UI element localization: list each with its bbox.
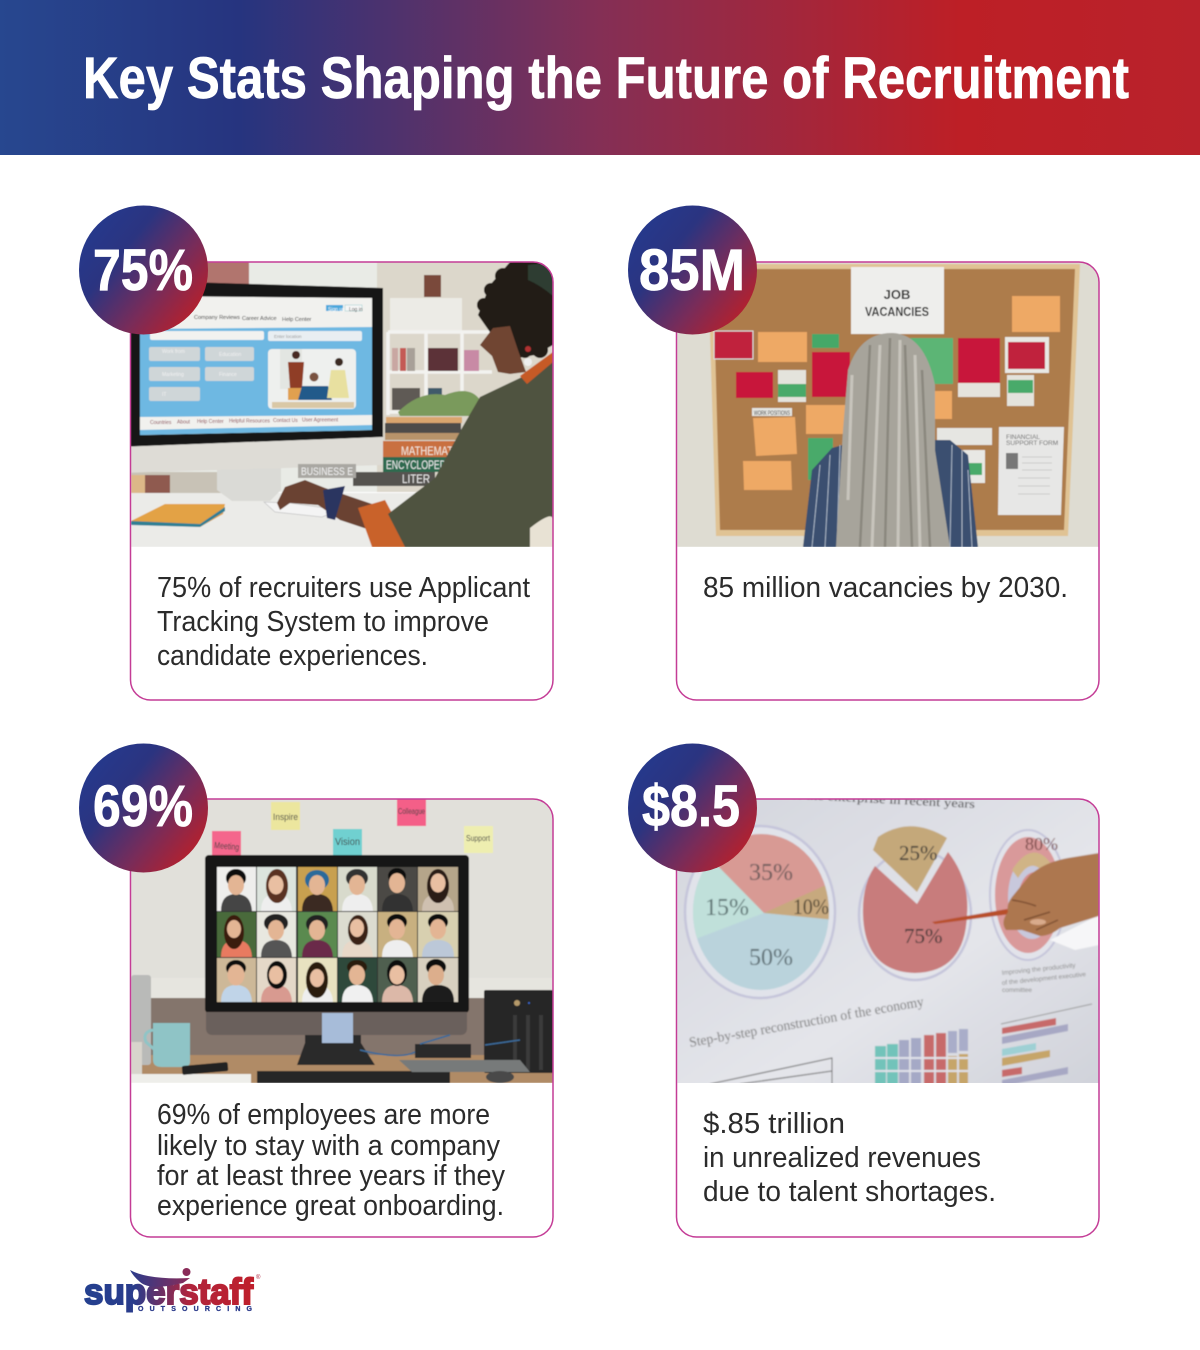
text: 69% description: [157, 1099, 505, 1222]
photo: woman at desktop computer: MATHEMAT: [401, 444, 454, 458]
logo wordmark: superstaff: [84, 1271, 254, 1312]
bookshelf: [388, 332, 492, 415]
job notices: FINANCIAL: [1006, 434, 1040, 441]
screen photo: [268, 349, 356, 409]
business book: [298, 464, 356, 478]
panel: $8.5 trillion: [628, 744, 1099, 1237]
pie chart 3: [990, 830, 1066, 960]
badge: 85M: [628, 206, 757, 334]
desk items: [131, 1074, 251, 1083]
text: 85M description: 85 million vacancies by 2030.: [703, 572, 1068, 604]
photo: woman at desktop computer: ENCYCLOPED: [386, 458, 446, 472]
panel: 75% recruiters: [79, 206, 553, 700]
photo: woman at desktop computer: Log in: [349, 307, 363, 313]
book stack: [386, 417, 462, 423]
job notices: SUPPORT FORM: [1006, 440, 1058, 447]
photo: video call on monitor: [131, 799, 554, 1083]
badge: 75%: 75%: [93, 238, 193, 303]
desk background: [131, 472, 221, 494]
photo: charts on a whiteboard: Step-by-step reconstruction of the economy: [688, 995, 925, 1051]
text: 69% description: likely to stay with a company: [157, 1130, 500, 1162]
photo: video call on monitor: Support: [466, 834, 491, 843]
pie chart 1: 50%: [749, 945, 793, 971]
blue striped jacket: [803, 440, 978, 547]
white glare: [1050, 915, 1099, 950]
text: 69% description: experience great onboarding.: [157, 1190, 504, 1222]
logo tagline: OUTSOURCING: [138, 1306, 253, 1313]
photo: video call on monitor: Vision: [335, 837, 360, 848]
network storage box: [484, 990, 554, 1073]
panel: 69% employees: [79, 744, 554, 1237]
badge: 69%: [79, 744, 208, 872]
photo: woman at desktop computer: Sign up: [328, 307, 345, 313]
badge: 85M: 85M: [639, 238, 745, 303]
silver tower and mug: [131, 975, 151, 1065]
text: $8.5 description: $.85 trillion: [703, 1108, 845, 1140]
card border: [676, 262, 1099, 700]
face: [480, 326, 526, 374]
logo registered mark: ®: [256, 1274, 261, 1281]
text: 75% description: Tracking System to improve: [157, 606, 489, 638]
caption and chart text: committee: [1002, 987, 1032, 994]
job notices: [714, 296, 1064, 515]
photo: woman at desktop computer: Help Center: [197, 419, 224, 425]
photo: video call on monitor: Colleague: [398, 807, 425, 816]
photo: woman at desktop computer: Helpful Resources: [229, 418, 270, 424]
monitor stand: [297, 1035, 375, 1065]
text: $8.5 description: due to talent shortages.: [703, 1176, 996, 1208]
logo swoosh: [130, 1270, 190, 1287]
photo: woman at desktop computer: Marketing: [162, 372, 184, 378]
photo: woman at desktop computer: Countries: [150, 420, 172, 426]
orange sleeve: [358, 500, 410, 547]
curly hair: [477, 260, 553, 358]
pie chart 1: 35%: [749, 860, 793, 886]
job notices: WORK POSITIONS: [754, 411, 790, 417]
horizontal bars: [1001, 1004, 1092, 1086]
keyboard: [264, 502, 340, 517]
photo: woman at desktop computer: Enter location: [274, 334, 302, 339]
text: 75% description: [157, 572, 530, 672]
photo: woman at desktop computer: Finance: [219, 372, 237, 378]
pie chart 2: 25%: [899, 841, 938, 865]
photo: woman at desktop computer: Company Reviews: [194, 315, 240, 321]
badge: 69%: 69%: [93, 774, 193, 839]
square grid: [875, 1029, 968, 1084]
caption and chart text: of the development executive: [1001, 971, 1087, 987]
badge: 75%: [79, 206, 208, 334]
photo: video call on monitor: Meeting: [214, 840, 240, 852]
photo: woman at desktop computer: BUSINESS E: [301, 466, 353, 478]
monitor: [120, 280, 383, 447]
notebook: [131, 504, 225, 527]
panel: 85M vacancies: [628, 206, 1099, 700]
photo: woman at desktop computer: About: [177, 420, 191, 426]
photo: job vacancies board: VACANCIES: [865, 304, 929, 319]
card border: [130, 799, 553, 1237]
jacket: [388, 357, 553, 547]
caption and chart text: Improving the productivity: [1001, 962, 1077, 977]
monitor stand: [217, 468, 281, 501]
photo: woman at desktop computer: Help Center: [282, 317, 312, 323]
card border: [676, 799, 1099, 1237]
pie chart 1: 15%: [705, 895, 749, 921]
sticky notes: [212, 831, 241, 855]
video call grid: [217, 867, 458, 1002]
photo: job vacancies board: JOB: [884, 287, 910, 302]
badge: $8.5: [628, 744, 757, 872]
photo: woman at desktop computer: IT: [162, 392, 166, 398]
badge: $8.5: $8.5: [642, 774, 740, 839]
photo: job vacancies board: [677, 262, 1099, 547]
pen: [932, 905, 1033, 924]
header banner: [0, 0, 1200, 155]
pie chart 2: 75%: [904, 924, 942, 948]
pie chart 3: 80%: [1025, 834, 1058, 854]
text: $8.5 description: in unrealized revenues: [703, 1142, 981, 1174]
logo dot: [182, 1268, 190, 1276]
caption and chart text: [1001, 962, 1087, 994]
hand: [1003, 853, 1099, 936]
text: $8.5 description: [703, 1108, 996, 1208]
monitor: [205, 855, 469, 1013]
photo: charts on a whiteboard: of the enterprise in recent years: [790, 787, 976, 811]
cork board: [708, 264, 1080, 536]
text: 69% description: for at least three years if they: [157, 1160, 505, 1192]
photo: woman at desktop computer: Career Advice: [242, 316, 277, 322]
logo: SuperStaff Outsourcing: [84, 1268, 261, 1313]
pie chart 1: [680, 825, 835, 998]
photo: video call on monitor: Inspire: [273, 812, 298, 822]
arm and hand: [276, 480, 372, 529]
pie chart 2: [859, 826, 971, 980]
long grey hair: [836, 333, 950, 547]
photo: woman at desktop computer: Contact Us: [273, 418, 298, 424]
text: 75% description: candidate experiences.: [157, 640, 428, 672]
photo: woman at desktop computer: [120, 260, 553, 547]
photo: woman at desktop computer: Work from: [162, 349, 185, 355]
photo: woman at desktop computer: User Agreement: [302, 418, 339, 424]
line chart frame: [710, 1058, 832, 1084]
text: 69% description: 69% of employees are more: [157, 1099, 490, 1131]
job vacancies sign: [851, 267, 944, 334]
photo: woman at desktop computer: LITER: [402, 472, 430, 486]
photo: charts on a whiteboard: [677, 787, 1099, 1086]
card border: [130, 262, 553, 700]
pie chart 1: 10%: [793, 894, 829, 919]
photo: woman at desktop computer: Education: [219, 352, 241, 358]
text: 75% description: 75% of recruiters use Applicant: [157, 572, 530, 604]
